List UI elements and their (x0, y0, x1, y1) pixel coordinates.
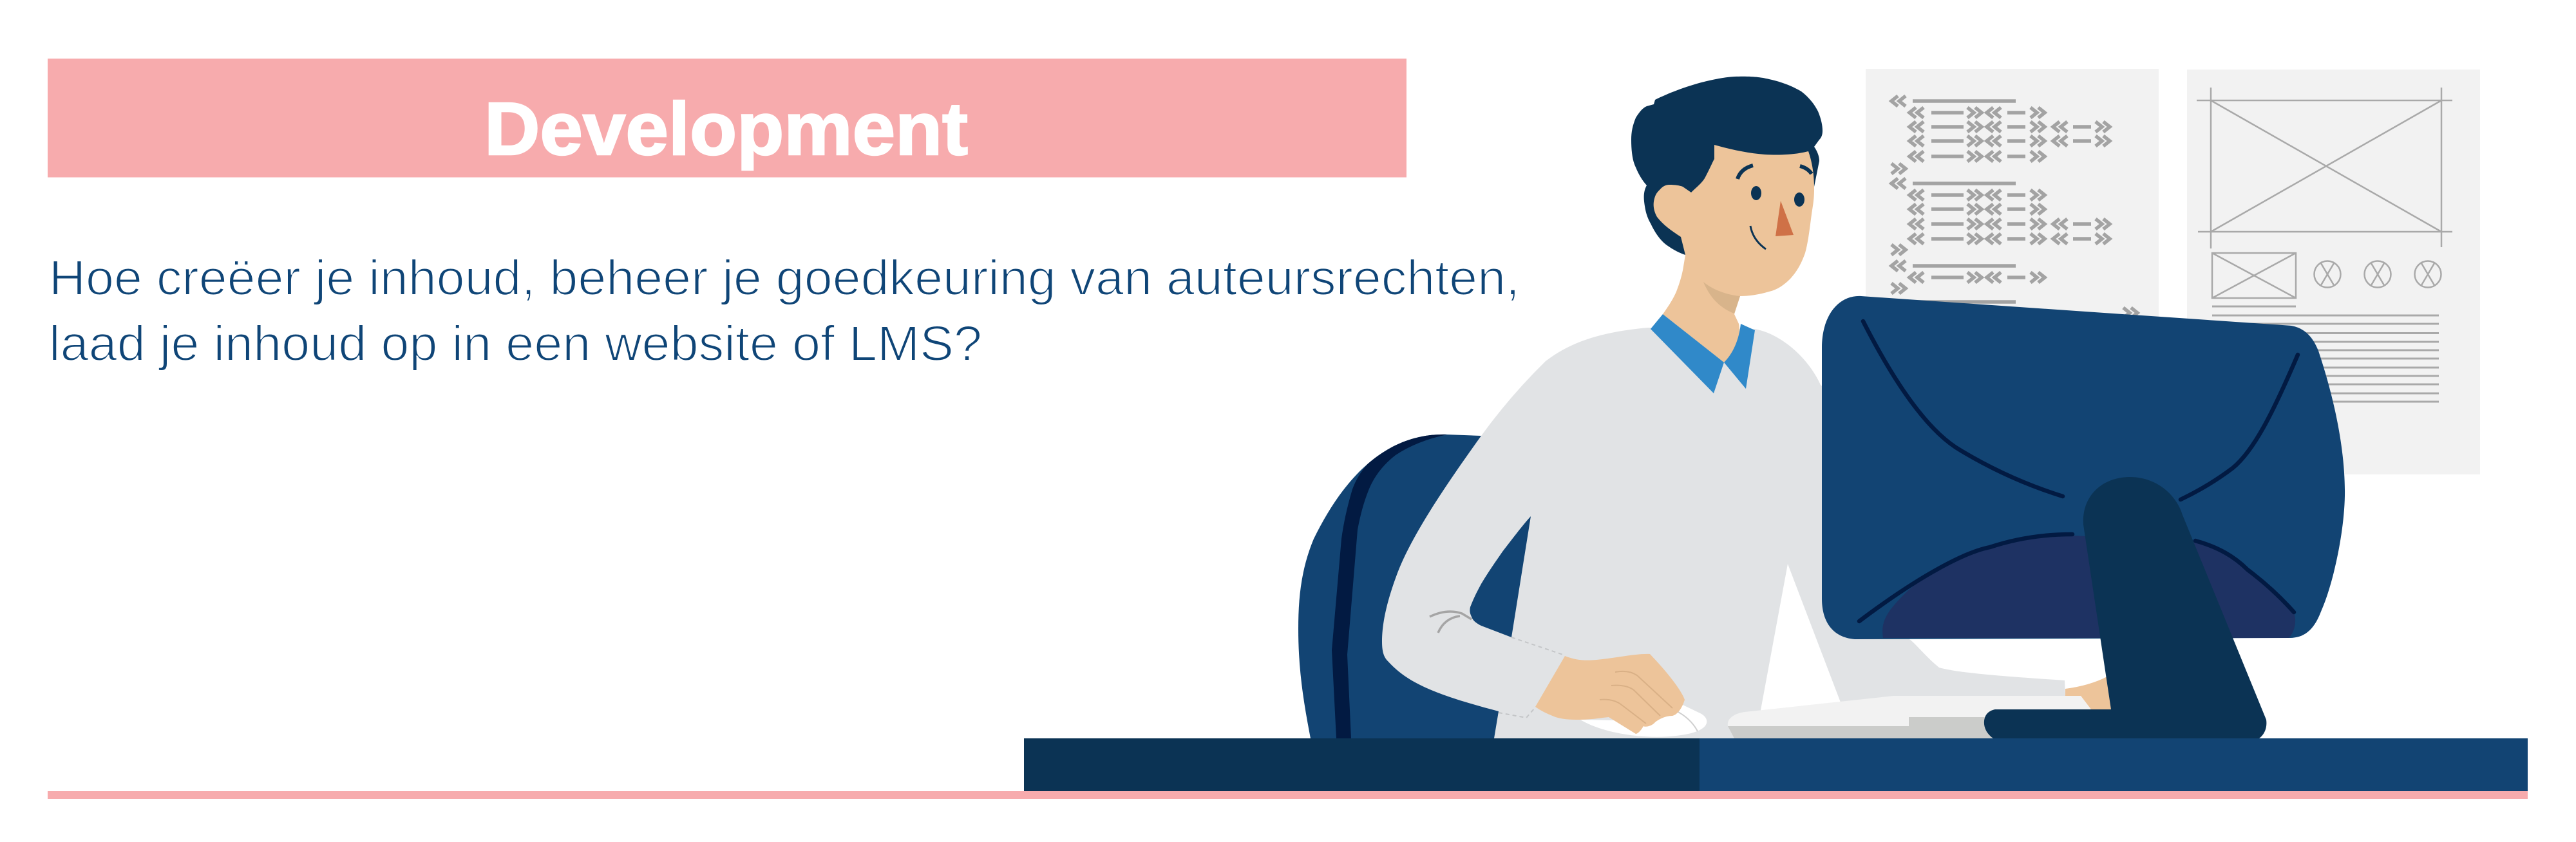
nose (1776, 201, 1794, 236)
collar (1651, 314, 1755, 393)
panel: wireframe document (2187, 70, 2480, 474)
code lines (1891, 96, 2137, 318)
keyboard (1728, 696, 2091, 738)
title: Development (484, 87, 968, 171)
neck shadow (1703, 282, 1740, 313)
sleeve details (1430, 612, 1565, 718)
person (1382, 77, 2112, 738)
screen shadow (1882, 536, 2295, 638)
left hand (1535, 654, 1685, 734)
face and neck (1654, 145, 1814, 362)
heading banner (48, 59, 1406, 178)
intro text block: Hoe creëer je inhoud, beheer je goedkeuring van auteursrechten, (49, 250, 1520, 306)
right hand (2065, 677, 2112, 709)
hair (1631, 77, 1823, 255)
intro text block (49, 250, 1520, 371)
wireframe image placeholder (2197, 88, 2452, 402)
mouse (1580, 705, 1707, 737)
head (1631, 77, 1823, 393)
eyes (1751, 186, 1761, 200)
intro text block: laad je inhoud op in een website of LMS? (49, 316, 982, 371)
desk (1024, 738, 2528, 791)
panel: code document (1866, 69, 2159, 429)
monitor (1822, 296, 2345, 639)
chair (1298, 435, 1501, 738)
monitor contour lines (1859, 321, 2298, 621)
gap between arm and torso (1470, 516, 1531, 637)
bottom rule (48, 791, 2528, 799)
eyebrows and mouth (1738, 165, 1812, 179)
monitor stand (1984, 477, 2266, 738)
sweater (1382, 328, 2065, 738)
